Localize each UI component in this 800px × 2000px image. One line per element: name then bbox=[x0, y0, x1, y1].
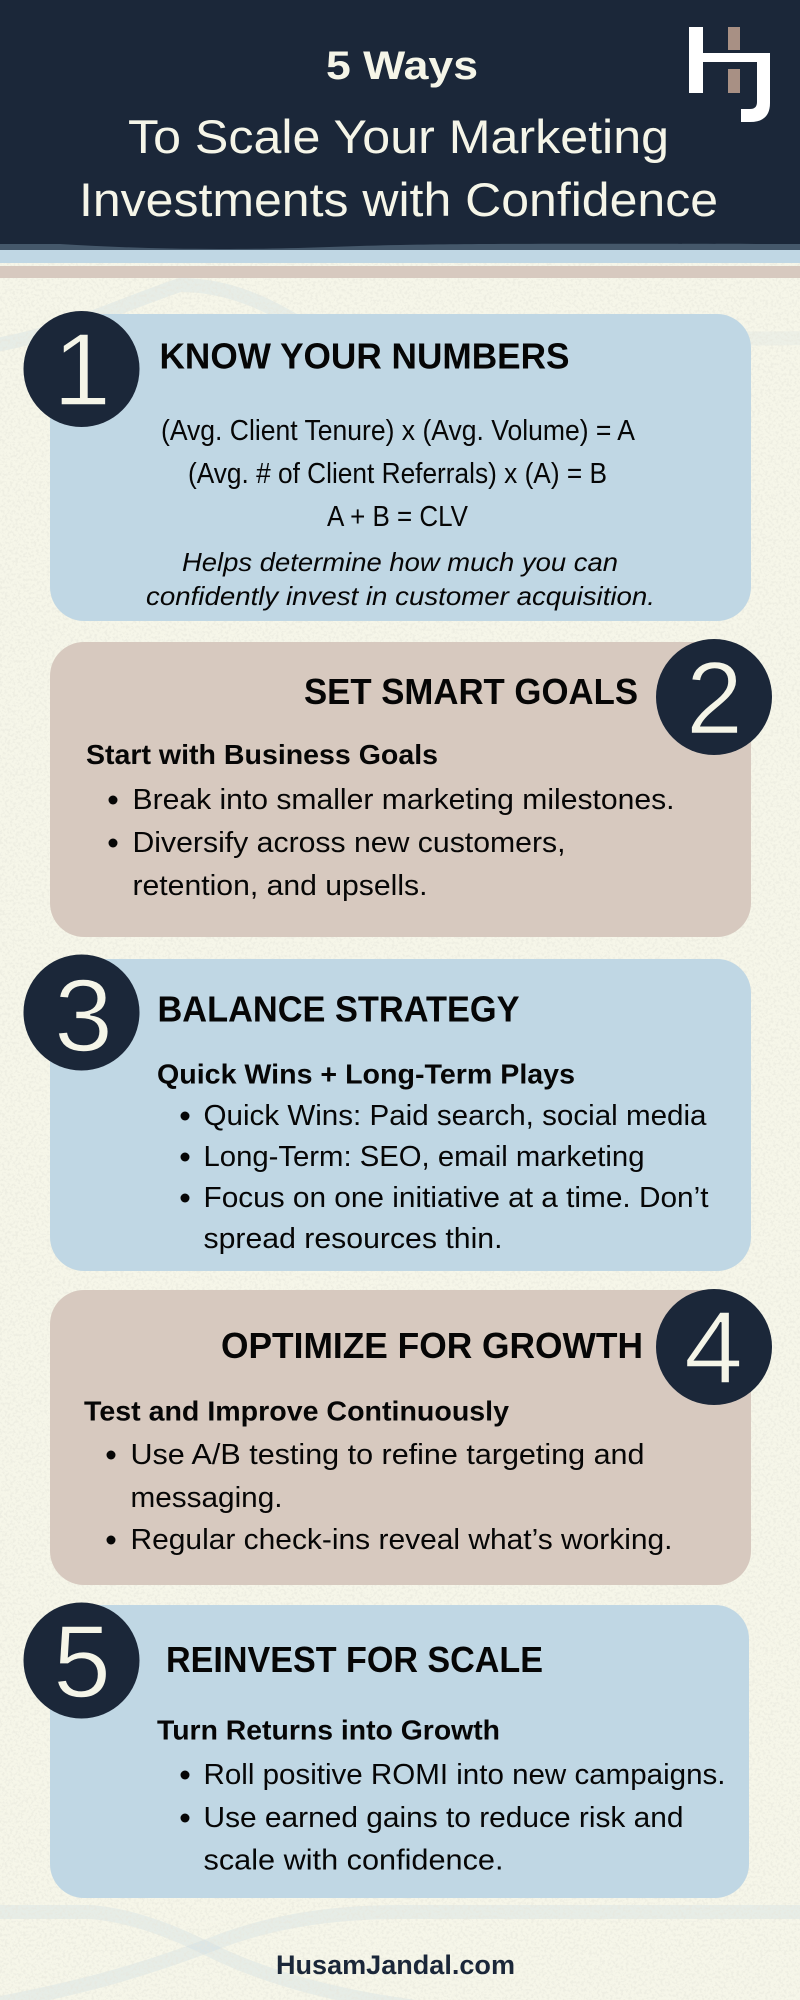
bullet list: scale with confidence. bbox=[204, 1844, 504, 1876]
panel: step 5 reinvest for scale bbox=[24, 1602, 749, 1898]
italic note: Helps determine how much you can bbox=[182, 547, 618, 577]
bullet list: Roll positive ROMI into new campaigns. bbox=[204, 1759, 726, 1791]
bullet list: Quick Wins: Paid search, social media bbox=[204, 1100, 707, 1132]
number badge 1 bbox=[24, 311, 140, 427]
number badge 3 bbox=[24, 954, 140, 1073]
title line: Investments with Confidence: Investments with Confidence bbox=[79, 173, 718, 226]
bullet list: Regular check-ins reveal what’s working. bbox=[130, 1524, 672, 1556]
number badge 5: 5 bbox=[53, 1604, 111, 1719]
formula lines bbox=[161, 415, 636, 533]
number badge 4 bbox=[656, 1289, 772, 1405]
bullet list: Use earned gains to reduce risk and bbox=[204, 1802, 684, 1834]
heading: BALANCE STRATEGY bbox=[158, 988, 520, 1030]
number badge 2: 2 bbox=[686, 640, 743, 756]
bullet list bbox=[108, 784, 674, 902]
icon: HJ logo bbox=[689, 27, 770, 122]
heading: KNOW YOUR NUMBERS bbox=[160, 336, 570, 376]
title line: To Scale Your Marketing: To Scale Your Marketing bbox=[128, 110, 669, 163]
formula lines: (Avg. Client Tenure) x (Avg. Volume) = A bbox=[161, 415, 636, 447]
italic note: confidently invest in customer acquisition. bbox=[146, 581, 655, 611]
bullet list bbox=[106, 1439, 672, 1556]
panel: step 3 balance strategy bbox=[24, 954, 751, 1271]
bullet list bbox=[180, 1759, 726, 1876]
heading: OPTIMIZE FOR GROWTH bbox=[221, 1325, 643, 1366]
bullet list: spread resources thin. bbox=[204, 1223, 502, 1255]
number badge 1: 1 bbox=[53, 312, 111, 427]
panel: step 4 optimize for growth bbox=[50, 1289, 772, 1585]
subheading: Start with Business Goals bbox=[86, 739, 438, 770]
bullet list: messaging. bbox=[130, 1482, 282, 1514]
bullet list: Break into smaller marketing milestones. bbox=[132, 784, 674, 816]
formula lines: A + B = CLV bbox=[327, 501, 469, 533]
number badge 2 bbox=[656, 639, 772, 756]
stripe: light blue band bbox=[0, 250, 800, 263]
formula lines: (Avg. # of Client Referrals) x (A) = B bbox=[188, 458, 607, 490]
heading: SET SMART GOALS bbox=[304, 671, 638, 712]
subheading: Quick Wins + Long-Term Plays bbox=[157, 1058, 575, 1090]
stripe: tan band bbox=[0, 266, 800, 278]
header banner bbox=[0, 0, 800, 250]
footer website: HusamJandal.com bbox=[276, 1950, 515, 1980]
bullet list: Use A/B testing to refine targeting and bbox=[130, 1439, 644, 1471]
title: 5 Ways: 5 Ways bbox=[326, 44, 478, 88]
number badge 4: 4 bbox=[684, 1290, 743, 1405]
panel: step 1 know your numbers bbox=[24, 311, 751, 621]
panel: step 2 set smart goals bbox=[50, 639, 772, 937]
bullet list: retention, and upsells. bbox=[132, 870, 428, 902]
bullet list: Diversify across new customers, bbox=[132, 827, 566, 859]
heading: REINVEST FOR SCALE bbox=[166, 1639, 543, 1680]
number badge 5 bbox=[24, 1602, 140, 1719]
bullet list bbox=[180, 1100, 708, 1255]
subheading: Test and Improve Continuously bbox=[84, 1396, 509, 1426]
bullet list: Focus on one initiative at a time. Don’t bbox=[204, 1182, 708, 1214]
number badge 3: 3 bbox=[54, 958, 113, 1073]
bullet list: Long-Term: SEO, email marketing bbox=[204, 1141, 644, 1173]
italic note bbox=[146, 547, 655, 611]
subheading: Turn Returns into Growth bbox=[157, 1714, 500, 1746]
